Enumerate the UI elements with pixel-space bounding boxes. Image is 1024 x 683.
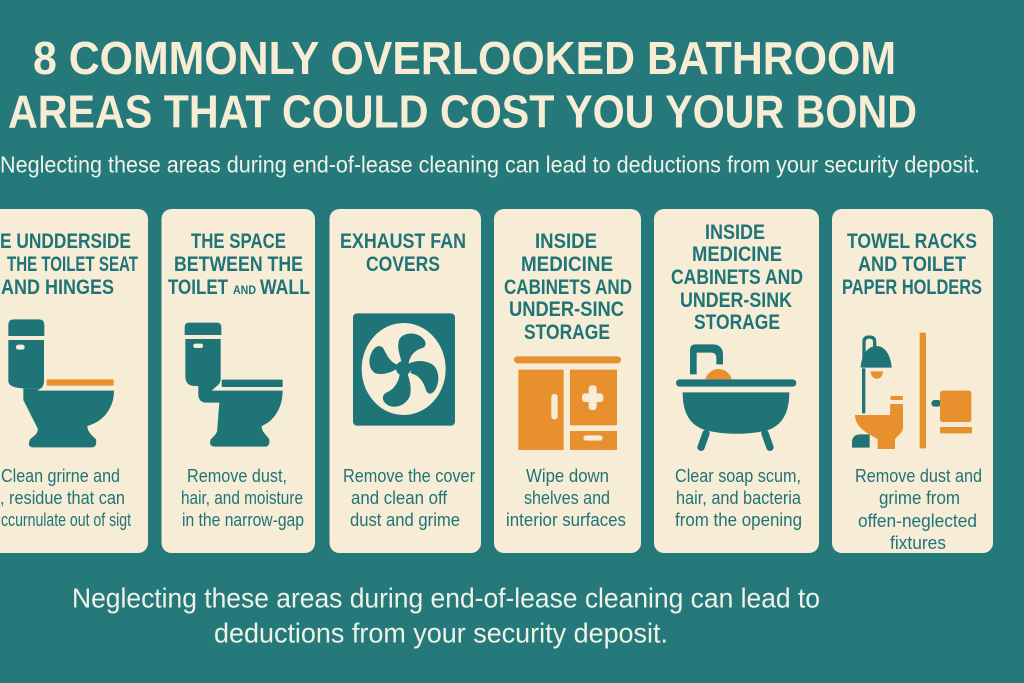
description: towel racks: grime from xyxy=(879,487,960,508)
heading: under-sink storage: STORAGE xyxy=(694,310,780,334)
description: exhaust fan: dust and grime xyxy=(350,509,460,530)
subtitle: Neglecting these areas during end-of-lease cleaning can lead to deductions from your security deposit. xyxy=(0,152,980,178)
panel: exhaust fan covers xyxy=(330,209,481,553)
description: medicine cabinets: Wipe down xyxy=(526,465,609,486)
heading: medicine cabinets xyxy=(504,229,632,344)
heading: toilet and wall: WALL xyxy=(260,275,310,299)
description: under-sink storage: from the opening xyxy=(675,509,802,530)
icon: shower, toilet and towel rack xyxy=(852,333,972,449)
description: under-sink storage: Clear soap scum, xyxy=(675,465,801,486)
heading: toilet and wall xyxy=(168,229,310,299)
description: toilet and wall: Remove dust, xyxy=(187,465,287,486)
description: towel racks: fixtures xyxy=(890,532,946,553)
heading: towel racks: TOWEL RACKS xyxy=(847,229,977,253)
footer note: deductions from your security deposit. xyxy=(214,618,668,649)
description: exhaust fan: and clean off xyxy=(351,487,448,508)
panel: towel racks and toilet paper holders xyxy=(832,209,993,553)
heading: under-sink storage: MEDICINE xyxy=(692,242,782,266)
description: medicine cabinets: interior surfaces xyxy=(506,509,626,530)
description: under-sink storage xyxy=(675,465,802,530)
heading: exhaust fan xyxy=(340,229,466,276)
heading: toilet and wall: THE SPACE xyxy=(191,229,286,253)
heading: toilet seat xyxy=(0,229,138,299)
description: medicine cabinets xyxy=(506,465,626,530)
description: toilet seat: ccurnulate out of sigt xyxy=(1,509,131,530)
panel: toilet seat and hinges xyxy=(0,209,148,553)
heading: medicine cabinets: STORAGE xyxy=(524,320,610,344)
description: toilet and wall: in the narrow-gap xyxy=(182,509,304,530)
heading: exhaust fan: EXHAUST FAN xyxy=(340,229,466,253)
description: under-sink storage: hair, and bacteria xyxy=(676,487,802,508)
heading: under-sink storage: CABINETS AND xyxy=(671,265,803,289)
icon: bathtub xyxy=(676,344,796,447)
description: towel racks xyxy=(855,465,982,553)
description: exhaust fan xyxy=(343,465,475,530)
title: AREAS THAT COULD COST YOU YOUR BOND xyxy=(8,86,917,138)
heading: toilet seat: E UNDDERSIDE xyxy=(0,229,131,253)
description: medicine cabinets: shelves and xyxy=(524,487,610,508)
heading: toilet seat: THE TOILET SEAT xyxy=(7,252,138,276)
heading: toilet and wall: AND xyxy=(233,283,256,297)
icon: exhaust fan xyxy=(353,313,455,426)
heading: toilet and wall: TOILET xyxy=(168,275,228,299)
heading: under-sink storage xyxy=(671,220,803,334)
heading: medicine cabinets: MEDICINE xyxy=(521,252,613,276)
description: towel racks: offen-neglected xyxy=(858,510,977,531)
heading: medicine cabinets: CABINETS AND xyxy=(504,275,632,299)
description: toilet seat: , residue that can xyxy=(0,487,125,508)
icon: cabinet xyxy=(514,356,621,450)
heading: towel racks: PAPER HOLDERS xyxy=(842,275,982,299)
panel: medicine cabinets xyxy=(494,209,641,553)
heading: towel racks xyxy=(842,229,982,299)
footer note xyxy=(72,582,820,649)
heading: towel racks: AND TOILET xyxy=(858,252,966,276)
description: toilet seat xyxy=(0,465,131,530)
description: towel racks: Remove dust and xyxy=(855,465,982,486)
description: toilet seat: Clean grirne and xyxy=(1,465,120,486)
footer note: Neglecting these areas during end-of-lease cleaning can lead to xyxy=(72,582,820,613)
heading: toilet and wall: BETWEEN THE xyxy=(174,252,303,276)
title: 8 COMMONLY OVERLOOKED BATHROOM xyxy=(33,32,896,84)
description: exhaust fan: Remove the cover xyxy=(343,465,475,486)
description: toilet and wall: hair, and moisture xyxy=(181,487,303,508)
panel: space between toilet and wall xyxy=(162,209,315,553)
icon: toilet xyxy=(185,323,283,447)
heading: toilet seat: AND HINGES xyxy=(1,275,114,299)
heading: under-sink storage: INSIDE xyxy=(705,220,765,244)
heading: medicine cabinets: INSIDE xyxy=(535,229,597,253)
heading: medicine cabinets: UNDER-SINC xyxy=(509,297,624,321)
panel: under-sink storage xyxy=(654,209,819,553)
heading: under-sink storage: UNDER-SINK xyxy=(680,288,792,312)
title xyxy=(8,32,917,138)
icon: toilet with orange seat xyxy=(8,319,114,447)
description: toilet and wall xyxy=(181,465,304,530)
heading: exhaust fan: COVERS xyxy=(366,252,440,276)
